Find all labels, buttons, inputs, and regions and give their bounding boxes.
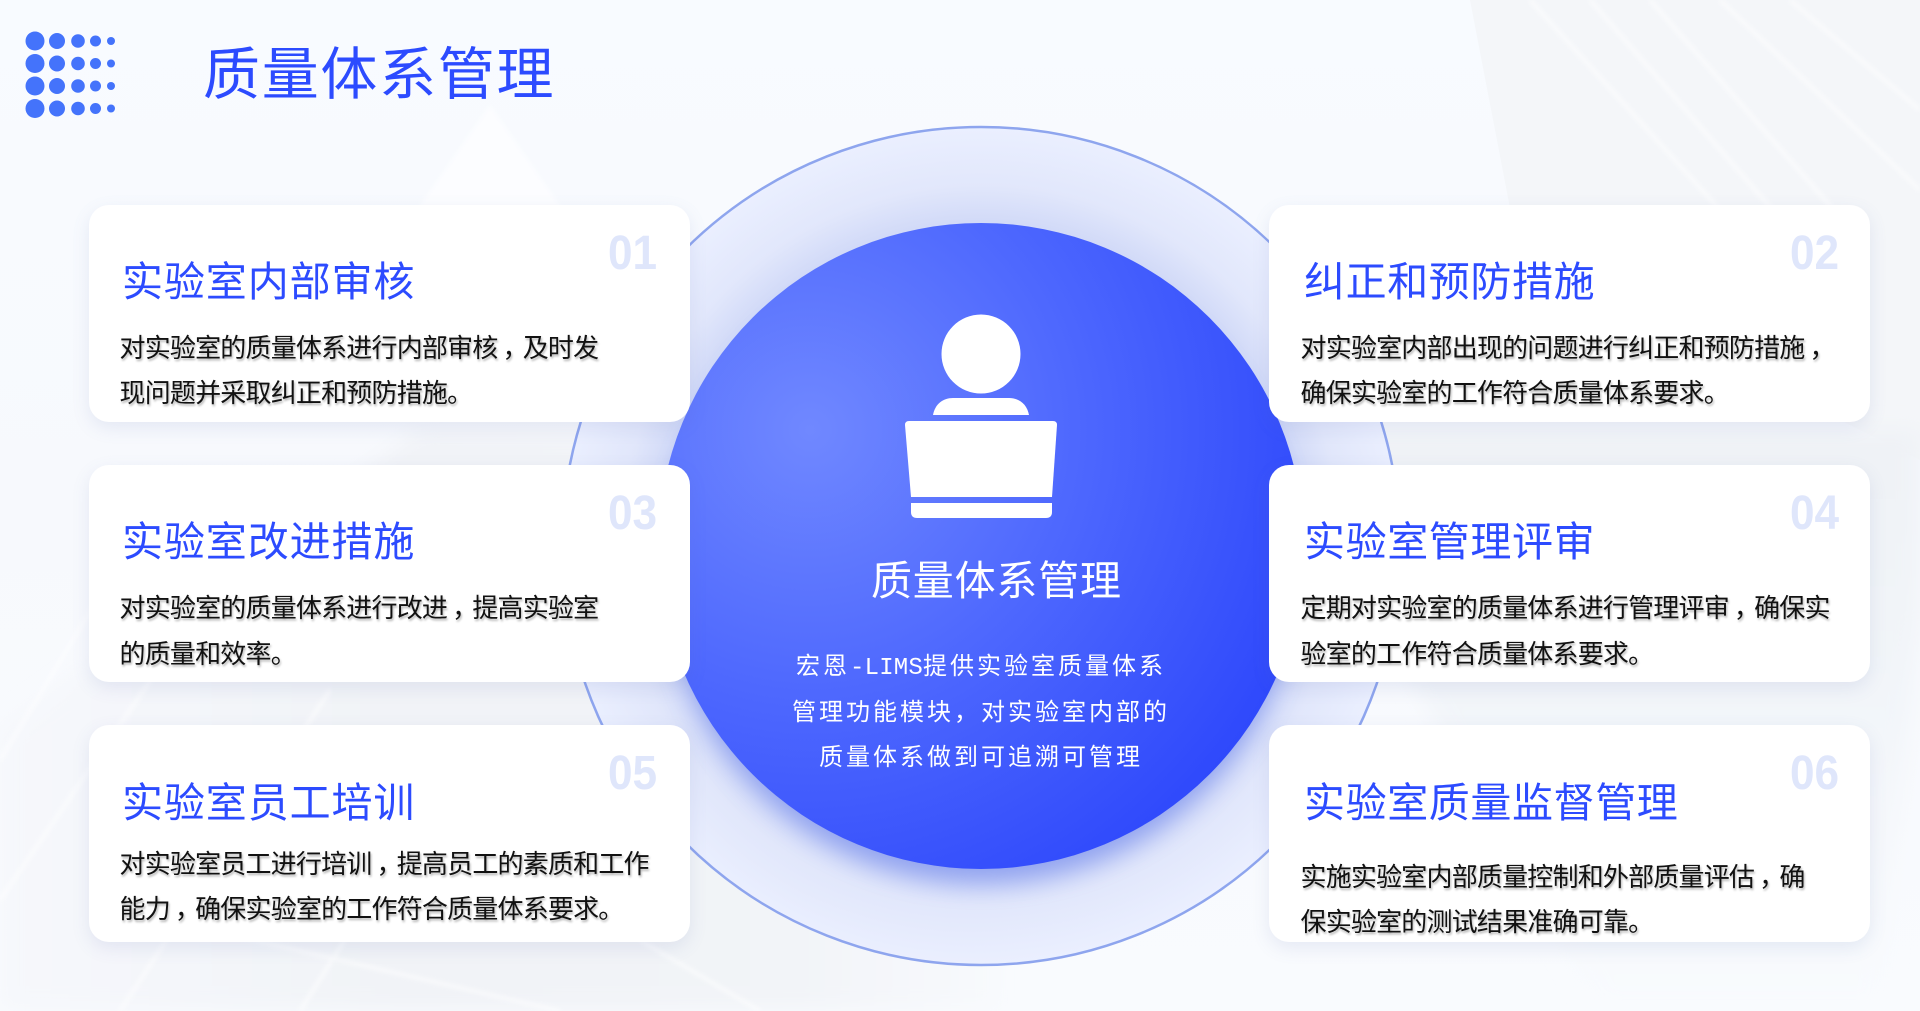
panel: card 01: [89, 205, 690, 422]
panel: card 02: 确保实验室的工作符合质量体系要求。: [1300, 378, 1729, 408]
panel: card 05: 05: [608, 747, 657, 800]
centre circle: [658, 223, 1304, 869]
panel: card 03: [89, 465, 690, 682]
panel: card 03: 03: [608, 487, 657, 540]
glow: [665, 252, 1297, 884]
panel: card 02: 02: [1790, 227, 1839, 280]
icon: person at laptop: [905, 314, 1057, 518]
panel: card 06: 实施实验室内部质量控制和外部质量评估，确: [1300, 862, 1805, 892]
panel: card 02: [1269, 205, 1870, 422]
centre description: 宏恩-LIMS提供实验室质量体系: [796, 653, 1166, 682]
panel: card 05: [89, 725, 690, 942]
panel: card 04: 验室的工作符合质量体系要求。: [1300, 639, 1653, 669]
panel: card 05: 实验室员工培训: [122, 780, 415, 826]
panel: card 04: 04: [1790, 487, 1839, 540]
centre description: [792, 653, 1170, 771]
panel: card 01: 现问题并采取纠正和预防措施。: [120, 378, 472, 408]
panel: card 06: [1269, 725, 1870, 942]
panel: card 04: [1269, 465, 1870, 682]
panel: card 05: 对实验室员工进行培训，提高员工的素质和工作: [120, 849, 649, 879]
panel: card 01: 01: [608, 227, 657, 280]
panel: card 05: 能力，确保实验室的工作符合质量体系要求。: [120, 894, 624, 924]
centre description: 质量体系做到可追溯可管理: [819, 744, 1143, 771]
panel: card 04: 定期对实验室的质量体系进行管理评审，确保实: [1300, 593, 1830, 623]
panel: card 01: 对实验室的质量体系进行内部审核，及时发: [120, 333, 598, 363]
title: 质量体系管理: [203, 43, 555, 107]
centre heading: 质量体系管理: [871, 558, 1122, 604]
outer ring: [562, 127, 1400, 965]
panel: card 06: 06: [1790, 747, 1839, 800]
panel: card 06: 保实验室的测试结果准确可靠。: [1300, 907, 1653, 937]
panel: card 03: 实验室改进措施: [122, 518, 415, 564]
panel: card 06: 实验室质量监督管理: [1304, 780, 1678, 826]
panel: card 03: 对实验室的质量体系进行改进，提高实验室: [120, 593, 598, 623]
panel: card 04: 实验室管理评审: [1304, 519, 1595, 565]
centre description: 管理功能模块，对实验室内部的: [792, 699, 1170, 726]
panel: card 02: 纠正和预防措施: [1304, 259, 1595, 305]
dots logo: [26, 32, 115, 118]
panel: card 03: 的质量和效率。: [120, 639, 296, 669]
panel: card 02: 对实验室内部出现的问题进行纠正和预防措施，: [1300, 333, 1835, 363]
panel: card 01: 实验室内部审核: [122, 258, 415, 304]
